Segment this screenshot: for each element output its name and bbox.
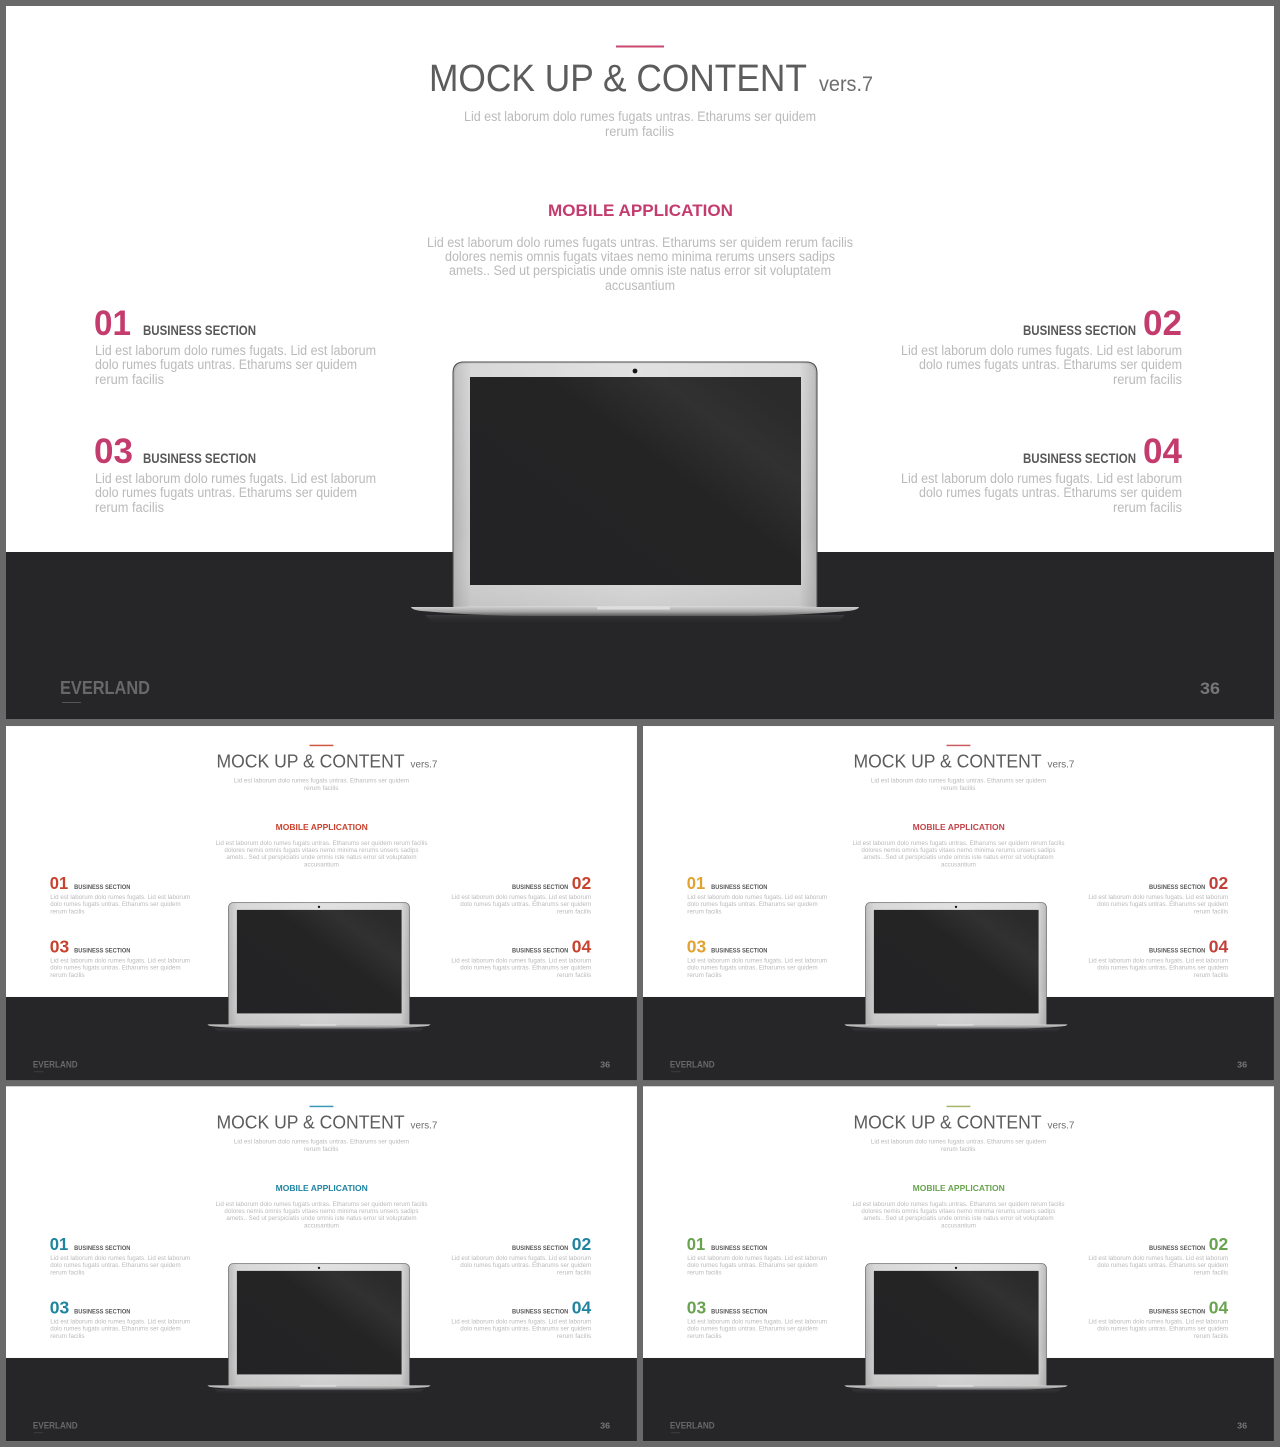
page number: 36 xyxy=(1237,1060,1247,1070)
section 04: dolo rumes fugats untras. Etharums ser quidem xyxy=(1097,965,1229,972)
section 03: rerum facilis xyxy=(687,972,722,979)
section 03: rerum facilis xyxy=(687,1333,722,1340)
panel: thumbnail green xyxy=(643,1086,1274,1441)
section 01: BUSINESS SECTION xyxy=(143,323,256,338)
section 02: Lid est laborum dolo rumes fugats. Lid est laborum xyxy=(1088,894,1229,901)
subtitle xyxy=(464,109,816,139)
section 02: BUSINESS SECTION xyxy=(1149,884,1205,891)
section 03 xyxy=(94,431,376,515)
section 03: 03 xyxy=(94,431,133,471)
section 02: 02 xyxy=(1209,873,1228,893)
section 02 xyxy=(451,1234,592,1276)
section 03: rerum facilis xyxy=(95,500,164,515)
section 02: Lid est laborum dolo rumes fugats. Lid est laborum xyxy=(451,894,592,901)
intro text: accusantium xyxy=(941,1223,976,1230)
section 01: rerum facilis xyxy=(687,1269,722,1276)
section 04: Lid est laborum dolo rumes fugats. Lid est laborum xyxy=(901,471,1182,486)
section 02: BUSINESS SECTION xyxy=(1149,1245,1205,1252)
section 04 xyxy=(1088,1298,1229,1340)
section 03: BUSINESS SECTION xyxy=(74,1309,131,1316)
intro text: amets.. Sed ut perspiciatis unde omnis iste natus error sit voluptatem xyxy=(226,1215,417,1222)
section 04: Lid est laborum dolo rumes fugats. Lid est laborum xyxy=(451,1319,592,1326)
section 04: BUSINESS SECTION xyxy=(1149,948,1205,955)
intro text xyxy=(215,840,428,869)
section 01 xyxy=(94,303,376,387)
section 02: rerum facilis xyxy=(1194,908,1229,915)
title: MOCK UP & CONTENT xyxy=(429,58,807,100)
section 03: dolo rumes fugats untras. Etharums ser quidem xyxy=(50,965,181,972)
intro text: amets.. Sed ut perspiciatis unde omnis iste natus error sit voluptatem xyxy=(226,854,417,861)
section 04: dolo rumes fugats untras. Etharums ser quidem xyxy=(919,485,1182,500)
section 02: 02 xyxy=(1209,1234,1228,1254)
section 04: Lid est laborum dolo rumes fugats. Lid est laborum xyxy=(451,958,592,965)
section 02: 02 xyxy=(572,873,591,893)
section 02: rerum facilis xyxy=(557,908,592,915)
subtitle: Lid est laborum dolo rumes fugats untras. Etharums ser quidem xyxy=(871,1139,1046,1146)
section 02: dolo rumes fugats untras. Etharums ser quidem xyxy=(1097,901,1229,908)
section 04: dolo rumes fugats untras. Etharums ser quidem xyxy=(460,1326,592,1333)
section 01: Lid est laborum dolo rumes fugats. Lid est laborum xyxy=(687,1255,827,1262)
section 03 xyxy=(50,937,190,979)
section 02: dolo rumes fugats untras. Etharums ser quidem xyxy=(460,901,592,908)
section 02 xyxy=(1088,873,1229,915)
section 01: dolo rumes fugats untras. Etharums ser quidem xyxy=(95,357,357,372)
section 04: rerum facilis xyxy=(1194,972,1229,979)
section 04: 04 xyxy=(1209,937,1228,957)
section 01 xyxy=(687,1234,827,1276)
section 01: BUSINESS SECTION xyxy=(74,1245,131,1252)
section 03: Lid est laborum dolo rumes fugats. Lid est laborum xyxy=(95,471,376,486)
intro text xyxy=(427,235,853,293)
subtitle: Lid est laborum dolo rumes fugats untras. Etharums ser quidem xyxy=(871,778,1046,785)
laptop mockup xyxy=(845,1263,1067,1394)
section 01: rerum facilis xyxy=(50,908,85,915)
section 03: dolo rumes fugats untras. Etharums ser quidem xyxy=(687,965,818,972)
subtitle: Lid est laborum dolo rumes fugats untras. Etharums ser quidem xyxy=(234,778,409,785)
section 01: BUSINESS SECTION xyxy=(74,884,131,891)
section 04: 04 xyxy=(1143,431,1182,471)
intro text: dolores nemis omnis fugats vitaes nemo minima rerums unsers sadips xyxy=(224,847,419,854)
section 01: BUSINESS SECTION xyxy=(711,1245,768,1252)
section 03: dolo rumes fugats untras. Etharums ser quidem xyxy=(687,1326,818,1333)
title: vers.7 xyxy=(411,1121,438,1132)
section 04: Lid est laborum dolo rumes fugats. Lid est laborum xyxy=(1088,1319,1229,1326)
title: MOCK UP & CONTENT xyxy=(853,752,1042,773)
laptop mockup xyxy=(411,362,859,625)
section 03: dolo rumes fugats untras. Etharums ser quidem xyxy=(50,1326,181,1333)
intro text xyxy=(852,1201,1065,1230)
page number: 36 xyxy=(1200,679,1220,698)
section 01: 01 xyxy=(94,303,131,343)
section 03: Lid est laborum dolo rumes fugats. Lid est laborum xyxy=(50,1319,190,1326)
section 03: Lid est laborum dolo rumes fugats. Lid est laborum xyxy=(50,958,190,965)
section 04: rerum facilis xyxy=(1194,1333,1229,1340)
section 01: dolo rumes fugats untras. Etharums ser quidem xyxy=(50,1262,181,1269)
section 02: BUSINESS SECTION xyxy=(1023,323,1136,338)
section 04: rerum facilis xyxy=(557,972,592,979)
section 04: rerum facilis xyxy=(557,1333,592,1340)
section 02: Lid est laborum dolo rumes fugats. Lid est laborum xyxy=(901,343,1182,358)
section 02 xyxy=(451,873,592,915)
laptop mockup xyxy=(208,902,430,1033)
section 04: dolo rumes fugats untras. Etharums ser quidem xyxy=(1097,1326,1229,1333)
intro text: dolores nemis omnis fugats vitaes nemo minima rerums unsers sadips xyxy=(224,1208,419,1215)
page number: 36 xyxy=(1237,1421,1247,1431)
subtitle: rerum facilis xyxy=(605,124,674,139)
page number: 36 xyxy=(600,1060,610,1070)
section 03: 03 xyxy=(50,937,69,957)
intro text: accusantium xyxy=(304,1223,339,1230)
title: vers.7 xyxy=(411,760,438,771)
section 04 xyxy=(451,937,592,979)
panel: thumbnail red xyxy=(6,726,637,1080)
heading: mobile application: MOBILE APPLICATION xyxy=(913,822,1005,832)
title: MOCK UP & CONTENT xyxy=(216,1113,405,1134)
section 02: rerum facilis xyxy=(557,1269,592,1276)
section 01: Lid est laborum dolo rumes fugats. Lid est laborum xyxy=(95,343,376,358)
intro text xyxy=(852,840,1065,869)
footer brand: EVERLAND xyxy=(33,1421,78,1431)
subtitle: rerum facilis xyxy=(304,785,339,792)
section 01: Lid est laborum dolo rumes fugats. Lid est laborum xyxy=(50,1255,190,1262)
section 01: dolo rumes fugats untras. Etharums ser quidem xyxy=(687,1262,818,1269)
section 04: 04 xyxy=(1209,1298,1228,1318)
section 01: dolo rumes fugats untras. Etharums ser quidem xyxy=(50,901,181,908)
accent bar xyxy=(947,1106,970,1107)
section 01 xyxy=(687,873,827,915)
title: vers.7 xyxy=(819,73,873,96)
section 04: BUSINESS SECTION xyxy=(512,1309,568,1316)
section 04 xyxy=(451,1298,592,1340)
section 04: BUSINESS SECTION xyxy=(1149,1309,1205,1316)
section 02: dolo rumes fugats untras. Etharums ser quidem xyxy=(460,1262,592,1269)
section 03: BUSINESS SECTION xyxy=(711,1309,768,1316)
intro text: Lid est laborum dolo rumes fugats untras. Etharums ser quidem rerum facilis xyxy=(852,1201,1065,1208)
intro text: accusantium xyxy=(941,862,976,869)
section 02: Lid est laborum dolo rumes fugats. Lid est laborum xyxy=(451,1255,592,1262)
intro text: dolores nemis omnis fugats vitaes nemo minima rerums unsers sadips xyxy=(861,847,1056,854)
section 01 xyxy=(50,873,190,915)
subtitle: Lid est laborum dolo rumes fugats untras. Etharums ser quidem xyxy=(234,1139,409,1146)
footer brand: EVERLAND xyxy=(670,1421,715,1431)
section 01: rerum facilis xyxy=(95,372,164,387)
page number: 36 xyxy=(600,1421,610,1431)
section 01: 01 xyxy=(687,873,705,893)
title: vers.7 xyxy=(1048,760,1075,771)
heading: mobile application: MOBILE APPLICATION xyxy=(276,822,368,832)
section 01: 01 xyxy=(687,1234,705,1254)
section 04: BUSINESS SECTION xyxy=(1023,451,1136,466)
intro text: dolores nemis omnis fugats vitaes nemo minima rerums unsers sadips xyxy=(445,249,835,264)
footer brand: EVERLAND xyxy=(33,1060,78,1070)
section 02: rerum facilis xyxy=(1113,372,1182,387)
subtitle: Lid est laborum dolo rumes fugats untras. Etharums ser quidem xyxy=(464,109,816,124)
section 03 xyxy=(50,1298,190,1340)
intro text: Lid est laborum dolo rumes fugats untras. Etharums ser quidem rerum facilis xyxy=(215,1201,428,1208)
section 04: 04 xyxy=(572,937,591,957)
section 01: Lid est laborum dolo rumes fugats. Lid est laborum xyxy=(687,894,827,901)
section 03: rerum facilis xyxy=(50,1333,85,1340)
section 03: Lid est laborum dolo rumes fugats. Lid est laborum xyxy=(687,958,827,965)
heading: mobile application: MOBILE APPLICATION xyxy=(913,1183,1005,1193)
subtitle xyxy=(234,1139,409,1153)
section 03: BUSINESS SECTION xyxy=(74,948,131,955)
section 02: 02 xyxy=(572,1234,591,1254)
panel: thumbnail yellow and red xyxy=(643,726,1274,1080)
section 01: 01 xyxy=(50,1234,68,1254)
panel: main slide, pink xyxy=(6,6,1274,719)
section 03: BUSINESS SECTION xyxy=(143,451,256,466)
intro text xyxy=(215,1201,428,1230)
intro text: amets.. Sed ut perspiciatis unde omnis iste natus error sit voluptatem xyxy=(863,1215,1054,1222)
section 01: rerum facilis xyxy=(50,1269,85,1276)
section 01: BUSINESS SECTION xyxy=(711,884,768,891)
section 04: rerum facilis xyxy=(1113,500,1182,515)
laptop mockup xyxy=(845,902,1067,1033)
section 03: BUSINESS SECTION xyxy=(711,948,768,955)
section 03: Lid est laborum dolo rumes fugats. Lid est laborum xyxy=(687,1319,827,1326)
section 01: Lid est laborum dolo rumes fugats. Lid est laborum xyxy=(50,894,190,901)
footer brand: EVERLAND xyxy=(670,1060,715,1070)
title: vers.7 xyxy=(1048,1121,1075,1132)
intro text: dolores nemis omnis fugats vitaes nemo minima rerums unsers sadips xyxy=(861,1208,1056,1215)
section 03: 03 xyxy=(50,1298,69,1318)
accent bar xyxy=(310,745,333,746)
section 02: dolo rumes fugats untras. Etharums ser quidem xyxy=(919,357,1182,372)
heading: mobile application: MOBILE APPLICATION xyxy=(276,1183,368,1193)
section 04: dolo rumes fugats untras. Etharums ser quidem xyxy=(460,965,592,972)
section 01: rerum facilis xyxy=(687,908,722,915)
accent bar xyxy=(310,1106,333,1107)
section 02 xyxy=(901,303,1182,387)
intro text: Lid est laborum dolo rumes fugats untras. Etharums ser quidem rerum facilis xyxy=(427,235,853,250)
section 03: 03 xyxy=(687,1298,706,1318)
intro text: amets.. Sed ut perspiciatis unde omnis iste natus error sit voluptatem xyxy=(449,263,831,278)
section 03: rerum facilis xyxy=(50,972,85,979)
panel: thumbnail teal xyxy=(6,1086,637,1441)
section 02: rerum facilis xyxy=(1194,1269,1229,1276)
intro text: amets.. Sed ut perspiciatis unde omnis iste natus error sit voluptatem xyxy=(863,854,1054,861)
section 02: 02 xyxy=(1143,303,1182,343)
footer brand: EVERLAND xyxy=(60,678,150,698)
section 02: Lid est laborum dolo rumes fugats. Lid est laborum xyxy=(1088,1255,1229,1262)
section 04: 04 xyxy=(572,1298,591,1318)
section 02: dolo rumes fugats untras. Etharums ser quidem xyxy=(1097,1262,1229,1269)
section 02 xyxy=(1088,1234,1229,1276)
section 02: BUSINESS SECTION xyxy=(512,1245,568,1252)
section 03: dolo rumes fugats untras. Etharums ser quidem xyxy=(95,485,357,500)
subtitle xyxy=(871,778,1046,792)
subtitle: rerum facilis xyxy=(941,1146,976,1153)
accent bar xyxy=(947,745,970,746)
section 04 xyxy=(1088,937,1229,979)
intro text: Lid est laborum dolo rumes fugats untras. Etharums ser quidem rerum facilis xyxy=(215,840,428,847)
section 04: BUSINESS SECTION xyxy=(512,948,568,955)
intro text: accusantium xyxy=(605,278,675,293)
section 02: BUSINESS SECTION xyxy=(512,884,568,891)
section 03 xyxy=(687,937,827,979)
intro text: accusantium xyxy=(304,862,339,869)
section 01 xyxy=(50,1234,190,1276)
subtitle: rerum facilis xyxy=(304,1146,339,1153)
section 04 xyxy=(901,431,1182,515)
accent bar xyxy=(616,46,664,48)
section 04: Lid est laborum dolo rumes fugats. Lid est laborum xyxy=(1088,958,1229,965)
title: MOCK UP & CONTENT xyxy=(853,1113,1042,1134)
laptop mockup xyxy=(208,1263,430,1394)
heading: mobile application: MOBILE APPLICATION xyxy=(548,201,733,220)
intro text: Lid est laborum dolo rumes fugats untras. Etharums ser quidem rerum facilis xyxy=(852,840,1065,847)
subtitle xyxy=(234,778,409,792)
subtitle xyxy=(871,1139,1046,1153)
section 01: dolo rumes fugats untras. Etharums ser quidem xyxy=(687,901,818,908)
section 03 xyxy=(687,1298,827,1340)
title: MOCK UP & CONTENT xyxy=(216,752,405,773)
section 01: 01 xyxy=(50,873,68,893)
subtitle: rerum facilis xyxy=(941,785,976,792)
section 03: 03 xyxy=(687,937,706,957)
